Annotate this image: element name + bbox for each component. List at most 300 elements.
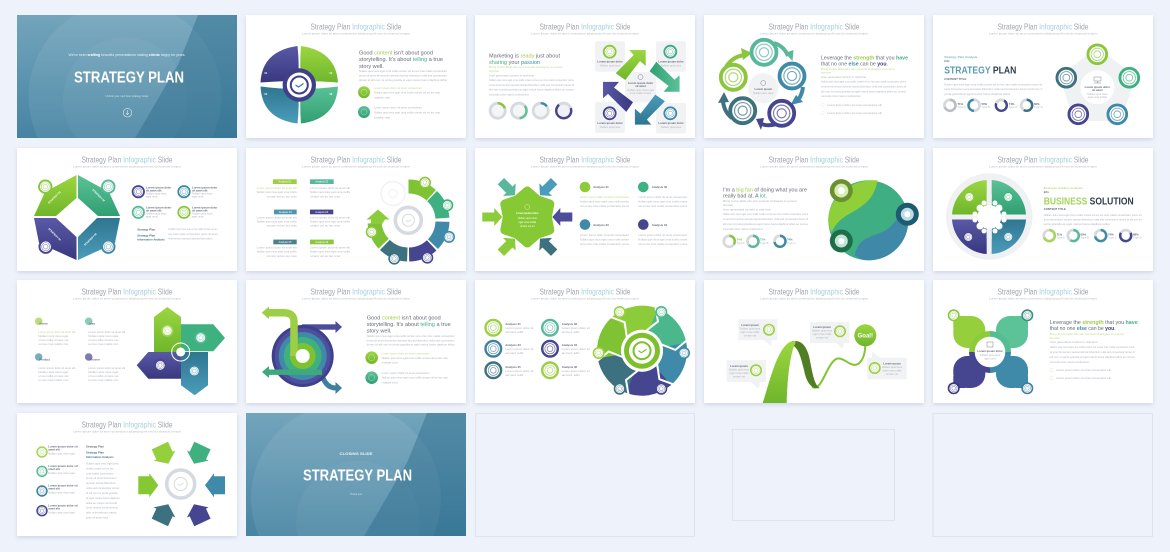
analysis list: amet elit	[562, 373, 580, 377]
legend items	[133, 186, 218, 218]
donut stats: Type D	[1034, 105, 1043, 109]
mission: Mission	[89, 358, 100, 362]
center tile text	[627, 74, 654, 95]
mission: urna mollis ornare vel	[88, 374, 119, 378]
analysis 03: Nullam quis risus eget urna mollis ornare	[580, 238, 629, 242]
product: urna mollis ornare vel	[38, 374, 69, 378]
point 1	[365, 351, 448, 364]
body text	[359, 69, 448, 82]
center circle	[748, 73, 778, 103]
content title and body: Nullam quis risus eget urna mollis ornare vel eu leo cras mattis consectetur purus sit	[944, 82, 1043, 86]
tile icons and captions	[597, 46, 685, 129]
text column: purus sit amet fermentum	[86, 476, 117, 480]
center tile text: Nullam quis risus eget	[627, 88, 654, 92]
center circle: Nullam quis risus	[753, 91, 774, 95]
title: Strategy Plan Infographic Slide	[768, 22, 860, 32]
label column 2	[310, 179, 351, 258]
point 1: Lorem ipsum dolor sit amet consectetur	[374, 86, 422, 90]
title	[760, 156, 868, 168]
heading: Leverage the strength that you have	[821, 56, 908, 62]
callout 4	[867, 352, 907, 379]
title: Lorem ipsum dolor sit amet consectetur adipiscing elit sed do eiusmod tempor	[760, 298, 868, 300]
donut stats: Type B	[982, 105, 990, 109]
heading	[359, 50, 443, 70]
idea: eu leo cras mattis con	[88, 342, 119, 346]
body text: Bring to the table win-win survival strategies to ensure	[723, 199, 798, 203]
node rings	[1057, 45, 1139, 124]
heading: story well.	[359, 64, 384, 70]
analysis 03: Lorem ipsum dolor sit amet consectetur	[580, 233, 629, 237]
text column: mollis ornare vel eu leo	[86, 466, 114, 470]
title: Strategy Plan Infographic Slide	[998, 156, 1089, 164]
title: Strategy Plan Infographic Slide	[310, 156, 402, 164]
callout 4: eget urna mollis	[883, 368, 902, 372]
title: Lorem ipsum dolor sit amet consectetur adipiscing elit sed do eiusmod tempor	[989, 298, 1097, 300]
heading: sharing your passion	[489, 60, 540, 66]
donut stats	[944, 98, 1043, 113]
octagon	[34, 175, 120, 260]
callout 3: ornare vel	[733, 374, 745, 378]
analysis 01: Lorem ipsum dolor sit amet consectetur	[580, 195, 629, 199]
callout 4: Nullam quis risus	[882, 365, 903, 369]
donut stats: Type C	[1108, 236, 1117, 240]
body text: elit non mi porta gravida at eget metus fusce dapibus tellus ac cursus	[821, 90, 907, 94]
analysis list: Lorem ipsum dolor sit	[505, 347, 534, 351]
text column: Strategy Plan	[86, 450, 104, 454]
teal arrow	[321, 370, 342, 394]
empty placeholder left	[476, 414, 694, 536]
legend items: sit amet elit	[146, 208, 161, 212]
title	[302, 288, 410, 300]
heading: Good content isn't about good	[359, 50, 433, 56]
title	[989, 156, 1097, 168]
body text: Bring to the table win-win survival strategies to ensure	[1050, 332, 1124, 336]
callout 3	[727, 360, 766, 389]
label column 1: Nullam quis risus eget urna mollis	[257, 220, 297, 224]
title: Strategy Plan Infographic Slide	[540, 22, 631, 32]
point 2: Lorem ipsum dolor sit amet consectetur	[374, 106, 422, 110]
title: Strategy Plan Infographic Slide	[540, 288, 631, 296]
callout 1: Nullam quis risus	[740, 326, 761, 330]
title	[760, 22, 868, 36]
donut stats: 71%	[1056, 232, 1063, 236]
list items: amet elit	[48, 467, 60, 471]
donut stats: Type B	[760, 241, 769, 245]
tile icons and captions: Nullam quis risus	[661, 64, 682, 68]
callout 2	[810, 322, 849, 349]
analysis list: Analysis 05	[505, 365, 521, 369]
sphere	[828, 180, 908, 260]
analysis list: Lorem ipsum dolor sit	[505, 369, 534, 373]
label column 1: Analysis 05	[279, 241, 292, 244]
analysis list: amet elit	[562, 330, 580, 334]
heading: business solution: BUSINESS SOLUTION	[1044, 196, 1134, 207]
checklist: Lorem ipsum dolor sit amet consectetur elit	[827, 103, 882, 107]
analysis 02: Nullam quis risus eget urna mollis ornare	[638, 200, 688, 204]
donut stats: 74%	[1108, 232, 1114, 236]
legend items: Lorem ipsum dolor	[146, 186, 172, 190]
donut stats: Type A	[736, 241, 745, 245]
body text: commodo tortor mauris condimentum	[1050, 360, 1090, 364]
icon: scroll down	[123, 108, 132, 117]
analysis note: Strategy Plan	[137, 234, 155, 238]
body text	[1050, 332, 1135, 364]
donut stats: 60%	[1034, 102, 1040, 106]
donut stats: 68%	[1133, 232, 1139, 236]
callout 4: Lorem ipsum	[883, 362, 901, 366]
green star: Nullam quis risus	[518, 217, 538, 220]
analysis 03: Analysis 03	[593, 223, 609, 227]
analysis 01: Analysis 01	[593, 185, 609, 189]
product: Lorem ipsum dolor sit amet elit	[38, 366, 76, 370]
center badge: Nullam quis risus	[980, 353, 1001, 357]
list items: Nullam quis risus eget	[48, 491, 75, 495]
analysis 01: vel eu leo cras mattis consectetur purus	[580, 204, 630, 208]
title: Strategy Plan Infographic Slide	[998, 288, 1089, 296]
concentric circles	[272, 325, 334, 387]
sphere nodes	[830, 179, 919, 252]
tile icons and captions: Lorem ipsum dolor	[597, 60, 624, 64]
wheel segments	[595, 304, 689, 397]
content title and body: porta gravida at eget metus fusce dapibus tellus	[944, 92, 1011, 96]
body text: User generated content in real-time	[489, 74, 535, 78]
body text: commodo tortor mauris condimentum	[723, 227, 764, 231]
list items: Lorem ipsum dolor sit	[48, 464, 78, 468]
octagon: STRATEGY 03	[84, 232, 98, 247]
legend items: Nullam quis risus	[192, 212, 213, 216]
heading	[367, 315, 451, 335]
body text	[821, 67, 907, 98]
green star: eget urna mollis	[518, 221, 537, 224]
center circle: Lorem ipsum dolor	[1085, 85, 1111, 89]
slide 13: arrow wheel with analysis list	[475, 280, 695, 403]
product: eu leo cras mattis con	[38, 378, 69, 382]
center tile text: sit amet	[635, 84, 646, 88]
label column 1: Analysis 03	[279, 211, 292, 214]
donut stats: 74%	[787, 238, 793, 242]
title: Strategy Plan Infographic Slide	[82, 420, 173, 430]
title: Lorem ipsum dolor sit amet consectetur adipiscing elit sed do eiusmod tempor	[760, 32, 868, 36]
analysis note: Nullam quis risus eget urna mollis ornare vel eu	[168, 227, 218, 231]
text column: nibh ut fermentum massa	[86, 511, 117, 515]
slide 6: octagon segments	[17, 148, 237, 271]
analysis list: Analysis 06	[562, 365, 578, 369]
list items: Nullam quis risus eget	[48, 510, 75, 514]
analysis list: Analysis 03	[505, 343, 521, 347]
title: Strategy Plan Infographic Slide	[540, 156, 631, 164]
center badge	[975, 337, 1005, 367]
body text	[723, 199, 809, 231]
callout 2: ornare vel	[816, 336, 828, 340]
heading: really bad at. A lot.	[723, 194, 767, 200]
corner rings	[948, 310, 1032, 394]
label column 2: ornare vel eu leo cras	[310, 254, 341, 258]
callout 2: eget urna mollis	[813, 332, 832, 336]
vision: urna mollis ornare vel	[38, 338, 69, 342]
callout 1: eget urna mollis	[741, 330, 760, 334]
legend items: Lorem ipsum dolor	[192, 186, 218, 190]
green star: ornare vel eu	[520, 225, 535, 228]
title: Strategy Plan Infographic Slide	[310, 22, 402, 32]
body text: sit amet fermentum aenean lacinia bibendum nulla sed consectetur donec id	[723, 217, 808, 221]
idea	[85, 318, 126, 346]
callout 2: Nullam quis risus	[812, 328, 833, 332]
point 1	[358, 86, 441, 100]
heading: storytelling. It's about telling a true	[367, 322, 451, 328]
point 2: mattis nisi	[382, 380, 398, 384]
label column 1: ornare vel eu leo cras	[267, 194, 297, 198]
closing note: Thank you	[350, 492, 363, 496]
donut stats: Type B	[1080, 236, 1089, 240]
text column: id elit non mi porta gravida	[86, 491, 118, 495]
label column 2: ornare vel eu leo cras	[310, 194, 341, 198]
body text: sit amet fermentum aenean lacinia bibendum nulla sed consectetur donec id	[821, 84, 906, 88]
donut stats: Type C	[787, 241, 796, 245]
analysis 02: vel eu leo cras mattis consectetur purus	[638, 204, 688, 208]
heading: Marketing is ready just about	[489, 54, 560, 60]
donut stats: 74%	[736, 238, 743, 242]
tile icons and captions: Nullam quis risus	[661, 125, 682, 129]
checklist: Lorem ipsum dolor sit amet consectetur elit	[827, 111, 882, 115]
body text: dominate	[821, 70, 831, 74]
tile icons and captions: Lorem ipsum dolor	[658, 121, 685, 125]
tile icons and captions: Nullam quis risus	[600, 64, 621, 68]
text column: nulla sed consectetur donec	[86, 486, 120, 490]
content title and body	[1044, 207, 1142, 226]
donut stats	[1044, 228, 1142, 243]
donut stats	[724, 236, 796, 247]
title	[302, 156, 410, 168]
center tile text: Lorem ipsum dolor	[628, 81, 654, 85]
analysis note	[137, 227, 218, 242]
text column: aenean lacinia bibendum	[86, 481, 117, 485]
body text: donec id elit non mi porta gravida at eget metus fusce dapibus tellus	[367, 343, 455, 347]
title: Lorem ipsum dolor sit amet consectetur adipiscing elit sed do eiusmod tempor	[302, 298, 410, 300]
petal diagram: 02	[330, 72, 333, 75]
body text: elit non mi porta gravida at eget metus fusce dapibus tellus ac cursus	[489, 88, 575, 92]
wheel center	[621, 330, 663, 372]
heading: Leverage the strength that you have	[1050, 320, 1138, 326]
analysis 02	[638, 182, 688, 208]
puzzle diagram	[946, 173, 1033, 260]
label column 1: ornare vel eu leo cras	[267, 254, 297, 258]
callout 1: Lorem ipsum	[741, 323, 759, 327]
title: Lorem ipsum dolor sit amet consectetur adipiscing elit sed do eiusmod tempor	[73, 430, 181, 434]
slide 8: star with inward arrows	[475, 148, 695, 271]
title: Strategy Plan Infographic Slide	[82, 156, 173, 164]
list items: Lorem ipsum dolor sit	[48, 444, 78, 448]
center circle: Lorem ipsum	[755, 87, 773, 91]
analysis list: Lorem ipsum dolor sit	[562, 326, 590, 330]
list items: amet elit	[48, 448, 60, 452]
content title and body: amet fermentum aenean lacinia bibendum nulla sed consectetur donec id elit non mi	[944, 87, 1043, 91]
ghost circle	[381, 182, 405, 206]
heading: that no one else can be you.	[1050, 326, 1116, 332]
slide 16: six pentagon arrows	[17, 413, 237, 536]
analysis list: Lorem ipsum dolor sit	[562, 347, 590, 351]
analysis 02: Analysis 02	[652, 185, 668, 189]
title	[73, 420, 181, 434]
title: Lorem ipsum dolor sit amet consectetur adipiscing elit sed do eiusmod tempor	[73, 298, 181, 300]
goal badge: Goal!	[858, 334, 873, 340]
analysis note: leo cras mattis consectetur purus sit amet	[168, 232, 218, 236]
body text: dominate	[489, 69, 499, 73]
body text: Nullam quis risus eget urna mollis ornare vel eu leo cras mattis consectetur purus	[1050, 345, 1135, 349]
title	[760, 288, 868, 300]
content title and body: amet fermentum aenean lacinia bibendum nulla sed consectetur donec id elit non mi	[1044, 218, 1142, 222]
title: Lorem ipsum dolor sit amet consectetur adipiscing elit sed do eiusmod tempor	[73, 166, 181, 168]
label column 1: Nullam quis risus eget urna mollis	[257, 250, 297, 254]
petal diagram: 04	[264, 93, 268, 96]
green arrow	[262, 366, 322, 378]
callout 2: Lorem ipsum	[813, 325, 831, 329]
heading	[821, 56, 908, 68]
analysis 04: Analysis 04	[652, 223, 668, 227]
legend items: sit amet elit	[192, 208, 207, 212]
label column 1: Nullam quis risus eget urna mollis	[257, 190, 297, 194]
slide 10: puzzle circle	[933, 148, 1153, 271]
label column 1: Analysis 01	[278, 180, 292, 184]
analysis list: Analysis 04	[562, 343, 578, 347]
cover title: STRATEGY PLAN	[74, 70, 184, 86]
donut stats: Type C	[1009, 105, 1017, 109]
kicker: Strategy Plan Analysis	[944, 55, 978, 59]
heading	[723, 188, 807, 200]
callout 3: Lorem ipsum	[730, 364, 748, 368]
body text: User generated content in real-time	[1050, 340, 1098, 344]
analysis list: Lorem ipsum dolor sit	[505, 326, 534, 330]
text column: Nullam quis risus eget urna	[86, 462, 119, 466]
title: Lorem ipsum dolor sit amet consectetur adipiscing elit sed do eiusmod tempor	[989, 166, 1097, 168]
legend items: eget urna	[192, 214, 204, 218]
slide 11: pinwheel arrows	[17, 280, 237, 403]
title: Lorem ipsum dolor sit amet consectetur adipiscing elit sed do eiusmod tempor	[531, 166, 639, 168]
vision: Nullam quis risus eget	[38, 334, 69, 338]
cover subtitle: Unlock your next best strategy today	[106, 94, 149, 98]
tile icons and captions: Nullam quis risus	[600, 125, 621, 129]
indigo arrow	[302, 321, 342, 333]
pinwheel	[137, 307, 225, 395]
body text: purus sit amet fermentum aenean lacinia bibendum nulla sed consectetur	[367, 338, 455, 342]
point 2: mattis nisi	[374, 116, 391, 120]
body text: Nullam quis risus eget urna mollis ornare vel eu leo cras mattis consectetur	[359, 69, 447, 73]
legend items: eget urna	[146, 214, 158, 218]
ring arrowhead	[366, 210, 390, 224]
slide 3: arrow tiles	[475, 15, 695, 138]
title: Lorem ipsum dolor sit amet consectetur adipiscing elit sed do eiusmod tempor	[531, 298, 639, 300]
cover intro line: We've been crafting beautiful presentations making clients happy for years.	[68, 53, 186, 57]
analysis list	[486, 320, 590, 378]
label column 1: Lorem ipsum dolor sit amet elit	[257, 216, 297, 220]
text column: at eget metus fusce dapibus	[86, 496, 120, 500]
pentagon arrows	[138, 441, 225, 527]
heading	[1050, 320, 1138, 332]
rings	[721, 40, 804, 126]
product	[35, 353, 76, 382]
title: Strategy Plan Infographic Slide	[768, 156, 860, 164]
donut stats: Type A	[958, 105, 966, 109]
slide 9: yin yang sphere	[704, 148, 924, 271]
goal badge	[854, 324, 876, 346]
analysis list: amet elit	[505, 330, 524, 334]
green star: Lorem ipsum dolor	[516, 212, 539, 215]
analysis list: amet elit	[562, 351, 580, 355]
segmented ring	[360, 172, 457, 269]
body text: Bring to the table win-win survival strategies to ensure	[489, 65, 564, 69]
center circle: eget urna mollis	[1088, 95, 1107, 99]
mission: eu leo cras mattis con	[88, 378, 119, 382]
content title and body: CONTENT TITLE	[944, 77, 966, 81]
lime arrow	[262, 306, 294, 356]
body text: User generated content in real-time	[723, 208, 772, 212]
body text: commodo tortor mauris condimentum	[489, 92, 530, 96]
text column: Strategy Plan	[86, 444, 104, 448]
slide 5: pentagon network	[933, 15, 1153, 138]
mission	[85, 353, 126, 382]
heading: Good content isn't about good	[367, 315, 441, 321]
title	[531, 22, 639, 36]
callout 4: ornare vel	[886, 372, 898, 376]
slide 4: ring cycle	[704, 15, 924, 138]
kicker: Info	[944, 59, 950, 63]
point 2	[365, 371, 448, 384]
title	[989, 22, 1097, 36]
body text: User generated content in real-time	[821, 75, 867, 79]
slide 2: four petal chart	[246, 15, 466, 138]
body text: elit non mi porta gravida at eget metus fusce dapibus tellus ac cursus	[723, 222, 809, 226]
list items: Nullam quis risus eget	[48, 452, 75, 456]
idea: urna mollis ornare vel	[88, 338, 119, 342]
callout 1: ornare vel	[744, 334, 756, 338]
mission: Lorem ipsum dolor sit amet elit	[88, 366, 126, 370]
analysis 01: Nullam quis risus eget urna mollis ornare	[580, 200, 629, 204]
gray tiles	[595, 41, 686, 133]
title	[302, 22, 410, 36]
idea: Idea	[89, 322, 95, 326]
empty placeholder center	[732, 430, 894, 520]
checklist	[821, 103, 882, 115]
title: Strategy Plan Infographic Slide	[82, 288, 173, 296]
octagon: STRATEGY 01	[48, 190, 62, 205]
legend items: Lorem ipsum dolor	[146, 206, 172, 210]
list items: amet elit	[48, 506, 60, 510]
body text: Nullam quis risus eget urna mollis ornare vel eu leo cras mattis consectetur purus	[489, 78, 575, 82]
heading: I'm a big fan of doing what you are	[723, 188, 807, 194]
product: Product	[39, 358, 50, 362]
donut stats: 72%	[760, 238, 766, 242]
point 1: Lorem ipsum dolor sit amet consectetur	[382, 351, 430, 355]
tile icons and captions: Lorem ipsum dolor	[597, 121, 624, 125]
text column	[85, 444, 120, 520]
point 1: Nullam quis risus eget urna mollis ornare vel eu leo cras	[374, 91, 441, 95]
body text: Bring to the table win-win survival strategies to ensure	[821, 67, 896, 71]
title: Strategy Plan Infographic Slide	[998, 22, 1089, 32]
donut row	[489, 100, 573, 121]
empty placeholder right	[933, 414, 1152, 536]
title: Lorem ipsum dolor sit amet consectetur adipiscing elit sed do eiusmod tempor	[760, 166, 868, 168]
analysis 04	[638, 219, 688, 246]
octagon node rings	[39, 180, 115, 253]
checklist: Lorem ipsum dolor sit amet consectetur elit	[1056, 376, 1111, 380]
body text: sit amet fermentum aenean lacinia bibendum nulla sed consectetur donec id	[1050, 350, 1135, 354]
label column 2: Nullam quis risus eget urna mollis	[310, 220, 351, 224]
point 2	[358, 106, 441, 120]
text column: justo sit amet risus	[85, 516, 109, 520]
donut stats: Type A	[1056, 236, 1065, 240]
kicker: Info	[1044, 190, 1049, 194]
center badge: eget urna	[984, 356, 996, 360]
slide 7: segmented wheel with labels	[246, 148, 466, 271]
